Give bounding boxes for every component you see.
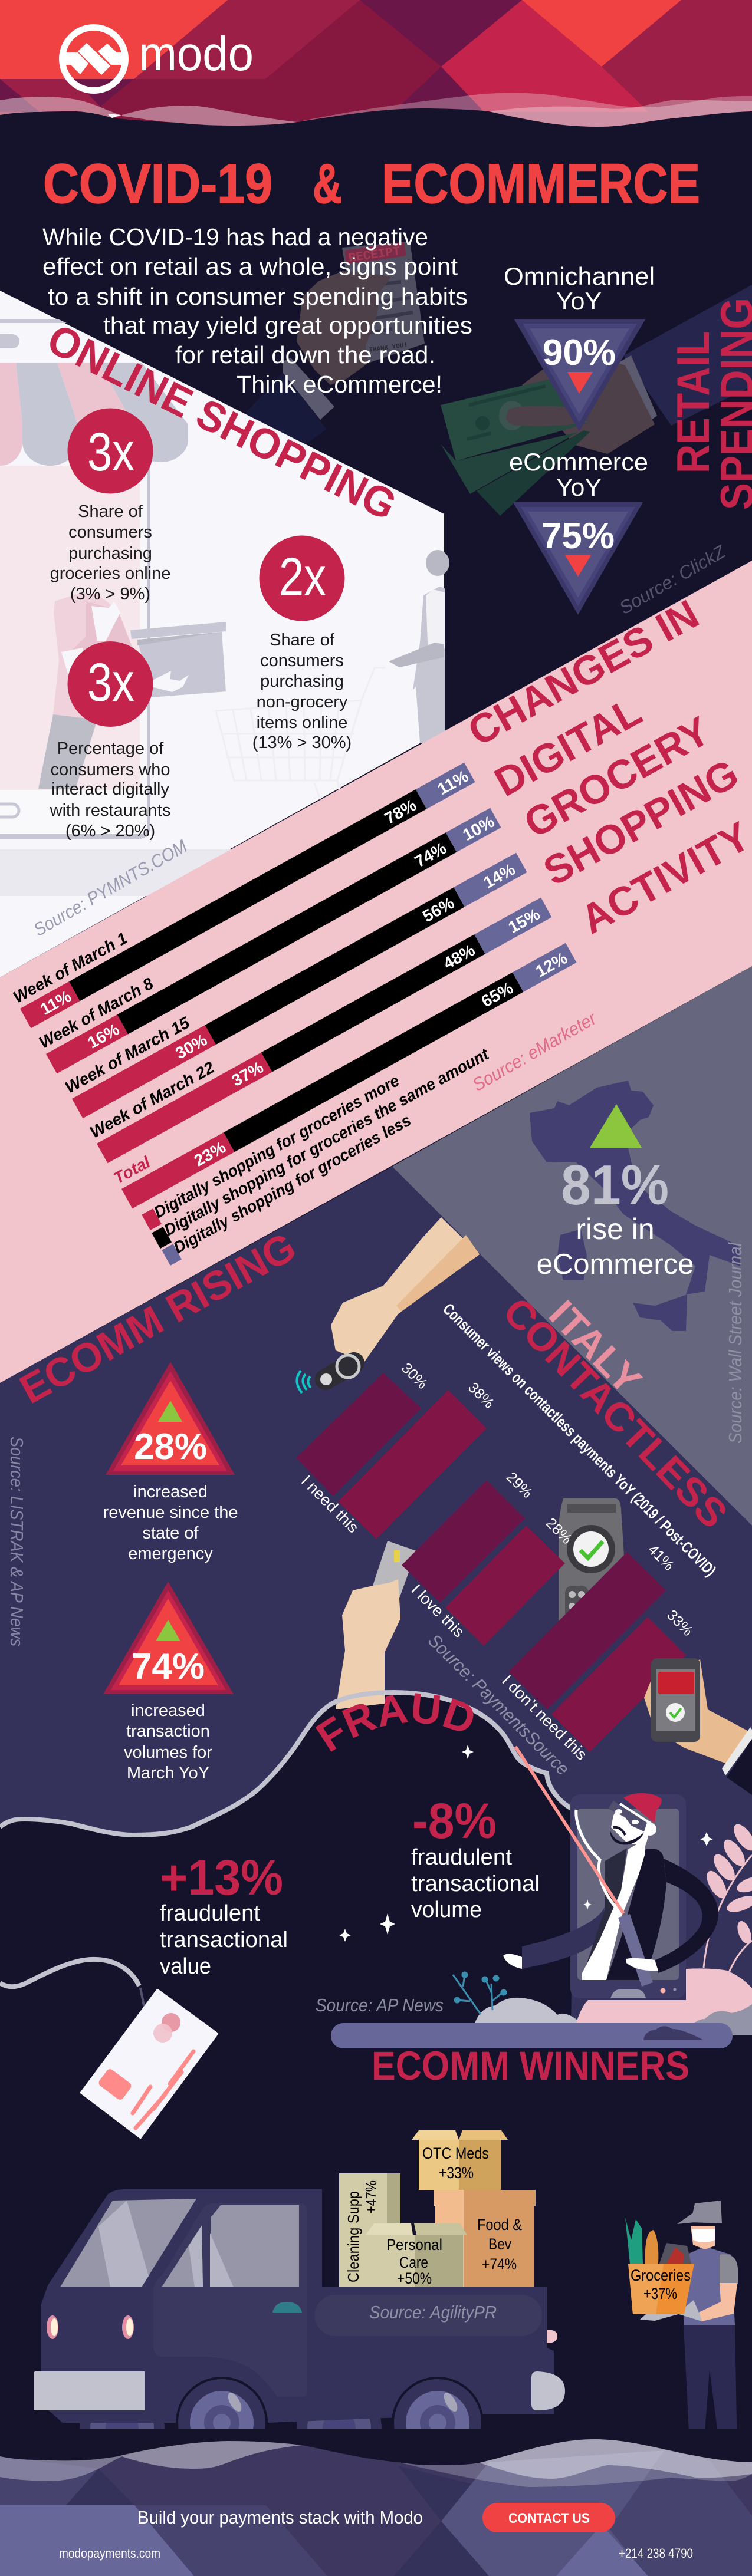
- illustration: delivery man with groceries: Groceries: [631, 2267, 691, 2284]
- stat: 2x non-grocery: 2x: [279, 547, 326, 607]
- box: otc meds: OTC Meds: [422, 2145, 489, 2162]
- icon: green up triangle: [590, 1104, 642, 1148]
- panel: online shopping: [0, 291, 449, 977]
- illustration: delivery man with groceries: [625, 2201, 739, 2464]
- intro text: [42, 223, 472, 398]
- omnichannel label: YoY: [556, 287, 602, 315]
- platform bar: [331, 2023, 733, 2048]
- stat: 81 percent: eCommerce: [537, 1249, 694, 1280]
- bar: week of march 1: 11%: [37, 987, 74, 1019]
- panel: ecomm rising background: [0, 1167, 752, 2035]
- column group: i don't need this: 41%: [645, 1541, 677, 1574]
- column group: i need this: 30%: [398, 1360, 431, 1392]
- stat: plus 13 percent: +13%: [160, 1850, 283, 1905]
- stat: 3x restaurants: 3x: [87, 653, 134, 713]
- heading: contactless: CONTACTLESS: [494, 1289, 736, 1537]
- bar: week of march 15: Week of March 15: [62, 1013, 193, 1097]
- source: ap news: Source: AP News: [316, 1995, 444, 2015]
- bar: week of march 15: 30%: [172, 1030, 210, 1062]
- stat: 3x groceries: consumers: [68, 523, 152, 542]
- column group: i need this: I need this: [298, 1472, 362, 1536]
- stat: 3x groceries: [50, 408, 170, 604]
- phone number: +214 238 4790: [619, 2546, 693, 2561]
- source: wall street journal: Source: Wall Street Journal: [725, 1242, 746, 1444]
- bar: total: 65%: [478, 979, 516, 1010]
- stat: minus 8 percent: fraudulent: [411, 1845, 512, 1870]
- header banner: [0, 0, 752, 141]
- stat: 2x non-grocery: Share of: [270, 631, 335, 650]
- icon: sparkles: [339, 1745, 713, 1942]
- intro text: While COVID-19 has had a negative: [42, 223, 428, 251]
- stat: 3x restaurants: [50, 641, 170, 841]
- bar: week of march 15: 56%: [419, 894, 457, 925]
- stat: 3x restaurants: with restaurants: [50, 801, 170, 820]
- illustration: receipt and hand behind intro: RECEIPT: [348, 245, 401, 266]
- column group: i need this: [296, 1360, 497, 1539]
- illustration: hills and clouds: [475, 1968, 752, 2035]
- store illustration: [0, 319, 449, 896]
- heading: changes in digital grocery shopping activity: CHANGES IN: [461, 591, 706, 755]
- ecommerce label: eCommerce: [509, 448, 648, 476]
- bag contents: [625, 2218, 643, 2264]
- stat: 3x groceries: 3x: [87, 422, 134, 482]
- stat: 3x groceries: (3% > 9%): [70, 585, 150, 604]
- text: 28 percent description: [103, 1483, 238, 1563]
- stat: 2x non-grocery: [252, 535, 352, 752]
- thief body: [584, 1848, 627, 1972]
- chart: consumer views on contactless payments: [296, 1300, 720, 1764]
- stat: minus 8 percent: -8%: [412, 1793, 497, 1849]
- heading: changes in digital grocery shopping activity: GROCERY: [517, 708, 717, 846]
- text: FRAUD: [316, 1693, 473, 1752]
- stat: 3x restaurants: Percentage of: [57, 739, 164, 758]
- stat: 3x groceries: purchasing: [68, 544, 152, 563]
- bar: week of march 15: 14%: [480, 860, 518, 892]
- source: pymnts: Source: PYMNTS.COM: [30, 836, 191, 940]
- stat: minus 8 percent: [411, 1793, 540, 1922]
- box: otc meds: [412, 2130, 508, 2190]
- stat: 3x restaurants: consumers who: [50, 760, 170, 779]
- heading: retail spending: RETAIL: [667, 331, 719, 473]
- omnichannel label: [504, 262, 655, 315]
- chart: grocery shopping activity bars: [10, 745, 576, 1266]
- stat: 3x groceries: groceries online: [50, 564, 170, 583]
- bar: total: 12%: [533, 948, 570, 981]
- ecommerce label: [509, 448, 648, 501]
- column group: i don't need this: 33%: [664, 1607, 696, 1639]
- panel: italy: [392, 966, 752, 1526]
- source: clickz: Source: ClickZ: [616, 541, 730, 618]
- main title: [43, 153, 700, 215]
- bar: total: [110, 925, 576, 1209]
- contact us button: [482, 2503, 615, 2532]
- box: cleaning supplies: +47%: [362, 2180, 380, 2213]
- stat: 2x non-grocery: (13% > 30%): [252, 733, 352, 752]
- main title: ECOMMERCE: [382, 153, 700, 215]
- ecommerce label: YoY: [556, 473, 602, 501]
- text: 74 percent description: volumes for: [124, 1743, 212, 1762]
- bar: week of march 22: 48%: [440, 941, 478, 973]
- illustration: payment terminal: [559, 1498, 628, 1633]
- box: food and bev: [434, 2190, 536, 2287]
- omnichannel label: Omnichannel: [504, 262, 655, 290]
- box: personal care: +50%: [397, 2269, 432, 2287]
- stat: plus 13 percent: transactional: [160, 1928, 288, 1952]
- stat: 2x non-grocery: non-grocery: [257, 693, 348, 711]
- intro text: to a shift in consumer spending habits: [48, 283, 468, 310]
- dark cloud: [643, 2026, 704, 2040]
- heading: italy: ITALY: [541, 1292, 650, 1402]
- box: personal care: Personal: [386, 2236, 442, 2254]
- icon: 90 percent down triangle: 90%: [543, 332, 616, 373]
- illustration: receipt and hand behind intro: [221, 242, 425, 457]
- icon: 75 percent down triangle: 75%: [541, 516, 615, 556]
- source: paymentssource: Source: PaymentsSource: [424, 1630, 573, 1779]
- bar: week of march 8: 16%: [84, 1020, 122, 1052]
- box: food and bev: +74%: [482, 2255, 517, 2273]
- illustration: hand holding cash and sleeve: [441, 285, 752, 516]
- box: personal care: [364, 2223, 467, 2287]
- column group: i don't need this: I don’t need this: [498, 1672, 590, 1764]
- source: agilitypr: [315, 2295, 542, 2336]
- heading: changes in digital grocery shopping activity: SHOPPING: [536, 750, 746, 894]
- stat: minus 8 percent: transactional: [411, 1872, 540, 1896]
- bar: week of march 8: [36, 790, 501, 1073]
- stat: 81 percent: rise in: [576, 1213, 655, 1246]
- icon: 90 percent down triangle: [514, 319, 645, 431]
- illustration: hand holding phone: [644, 1658, 752, 1795]
- footer call to action text: Build your payments stack with Modo: [137, 2507, 423, 2528]
- fraud wave outline: [0, 1692, 573, 1835]
- main title: COVID-19: [43, 153, 272, 215]
- intro text: effect on retail as a whole, signs point: [42, 253, 458, 280]
- contact us button: CONTACT US: [508, 2511, 590, 2526]
- bar: week of march 22: 15%: [505, 905, 543, 937]
- stat: 3x groceries: Share of: [78, 502, 143, 521]
- main title: &: [313, 153, 342, 215]
- illustration: blue plant: [453, 1972, 506, 2014]
- illustration: hand with card: [336, 1541, 416, 1709]
- illustration: cargo boxes: [339, 2130, 536, 2287]
- heading: fraud: [329, 1723, 475, 1754]
- text: 74 percent description: March YoY: [127, 1764, 209, 1783]
- panel: pink grocery band: [0, 561, 752, 1383]
- bar: week of march 1: 78%: [382, 796, 419, 828]
- column group: i don't need this: [498, 1541, 696, 1764]
- illustration: phone with thief: [503, 1747, 718, 1998]
- column group: i love this: 29%: [503, 1469, 536, 1501]
- panel: retail spending stat area: [504, 262, 752, 615]
- bar: week of march 15: [62, 835, 527, 1118]
- text: 74 percent description: [124, 1701, 212, 1783]
- heading: changes in digital grocery shopping activity: DIGITAL: [487, 688, 649, 805]
- illustration: truck wheels: [176, 2377, 484, 2469]
- bar: week of march 8: 10%: [459, 812, 497, 844]
- heading: online shopping: ONLINE SHOPPING: [40, 315, 403, 529]
- bar: week of march 22: 37%: [229, 1058, 267, 1090]
- bar: week of march 8: Week of March 8: [36, 974, 156, 1052]
- legend: Digitally shopping for groceries more: [151, 1071, 402, 1221]
- text: 74 percent description: transaction: [126, 1722, 210, 1741]
- illustration: hand with key fob: [297, 1217, 480, 1393]
- stat: 2x non-grocery: items online: [257, 713, 347, 732]
- legend: Digitally shopping for groceries the same amount: [161, 1045, 492, 1239]
- icon: 75 percent down triangle: [513, 502, 643, 615]
- box: personal care: Care: [399, 2254, 428, 2271]
- stat: 74 percent triangle: [103, 1582, 234, 1694]
- column group: i love this: [402, 1469, 575, 1646]
- stat: 3x restaurants: (6% > 20%): [65, 822, 155, 841]
- stat: 81 percent: [537, 1154, 694, 1280]
- box: cleaning supplies: Cleaning Supp: [344, 2191, 362, 2282]
- stat: 74 percent triangle: 74%: [132, 1646, 205, 1687]
- website: modopayments.com: [59, 2546, 160, 2561]
- bar: total: 23%: [191, 1138, 229, 1170]
- illustration: delivery truck: [34, 2189, 565, 2423]
- bar: total: Total: [110, 1152, 154, 1187]
- shopper: [426, 550, 449, 576]
- stat: plus 13 percent: [160, 1850, 288, 1979]
- illustration: far wheels: [80, 2386, 382, 2470]
- bag: [628, 2264, 694, 2314]
- box: food and bev: Food &: [477, 2216, 522, 2234]
- stat: 28 percent triangle: [106, 1362, 235, 1475]
- stat: plus 13 percent: value: [160, 1954, 211, 1979]
- thief left arm: [522, 1907, 605, 1969]
- source: agilitypr: Source: AgilityPR: [369, 2302, 497, 2323]
- source: listrak: Source: LISTRAK & AP News: [6, 1437, 27, 1646]
- stat: 2x non-grocery: purchasing: [260, 672, 344, 691]
- intro text: for retail down the road.: [175, 341, 435, 368]
- text: 74 percent description: increased: [131, 1701, 205, 1720]
- text: 28 percent description: revenue since the: [103, 1503, 238, 1522]
- column group: i love this: I love this: [408, 1581, 468, 1641]
- stat: plus 13 percent: fraudulent: [160, 1901, 260, 1926]
- bar: week of march 22: Week of March 22: [87, 1058, 218, 1142]
- illustration: receipt and hand behind intro: THANK YOU!: [369, 342, 408, 354]
- intro text: Think eCommerce!: [237, 371, 442, 398]
- column group: i need this: 38%: [465, 1379, 497, 1412]
- heading: ecomm rising: ECOMM RISING: [12, 1224, 303, 1412]
- ropes: [576, 1810, 619, 1912]
- box: otc meds: +33%: [439, 2164, 474, 2182]
- stat: minus 8 percent: volume: [411, 1898, 482, 1922]
- heading: changes in digital grocery shopping activity: ACTIVITY: [573, 813, 752, 943]
- logo: [63, 27, 254, 91]
- bar: week of march 1: 11%: [435, 767, 471, 798]
- bar: week of march 1: [10, 745, 475, 1028]
- illustration: phished credit card on hook: [0, 1959, 217, 2137]
- text: 28 percent description: state of: [142, 1524, 199, 1543]
- illustration: pink plant: [703, 1821, 752, 1974]
- heading: retail spending: [667, 298, 752, 510]
- stat: 81 percent: 81%: [561, 1154, 669, 1217]
- thief head: [643, 1823, 656, 1836]
- stat: 28 percent triangle: 28%: [134, 1427, 207, 1467]
- bar: week of march 8: 74%: [412, 839, 449, 871]
- box: food and bev: Bev: [488, 2235, 511, 2253]
- map of italy: [530, 1081, 740, 1331]
- heading: ecomm winners: ECOMM WINNERS: [372, 2043, 689, 2089]
- text: 28 percent description: emergency: [128, 1544, 213, 1563]
- footer band: [0, 2429, 752, 2576]
- illustration: delivery man with groceries: +37%: [643, 2285, 677, 2302]
- heading: changes in digital grocery shopping activity: [461, 591, 752, 943]
- source: emarketer: Source: eMarketer: [469, 1007, 600, 1095]
- stat: 3x restaurants: interact digitally: [51, 780, 169, 799]
- column group: i love this: 28%: [543, 1515, 575, 1547]
- logo: modo: [139, 27, 254, 81]
- text: 28 percent description: increased: [133, 1483, 208, 1501]
- legend: Digitally shopping for groceries less: [170, 1111, 414, 1257]
- intro text: that may yield great opportunities: [103, 312, 472, 339]
- stat: 2x non-grocery: consumers: [260, 651, 344, 670]
- box: cleaning supplies: [339, 2173, 400, 2287]
- bar: week of march 22: [87, 879, 551, 1163]
- bar: week of march 1: Week of March 1: [10, 929, 130, 1007]
- cashier: [53, 594, 133, 722]
- shopping cart: [216, 668, 386, 799]
